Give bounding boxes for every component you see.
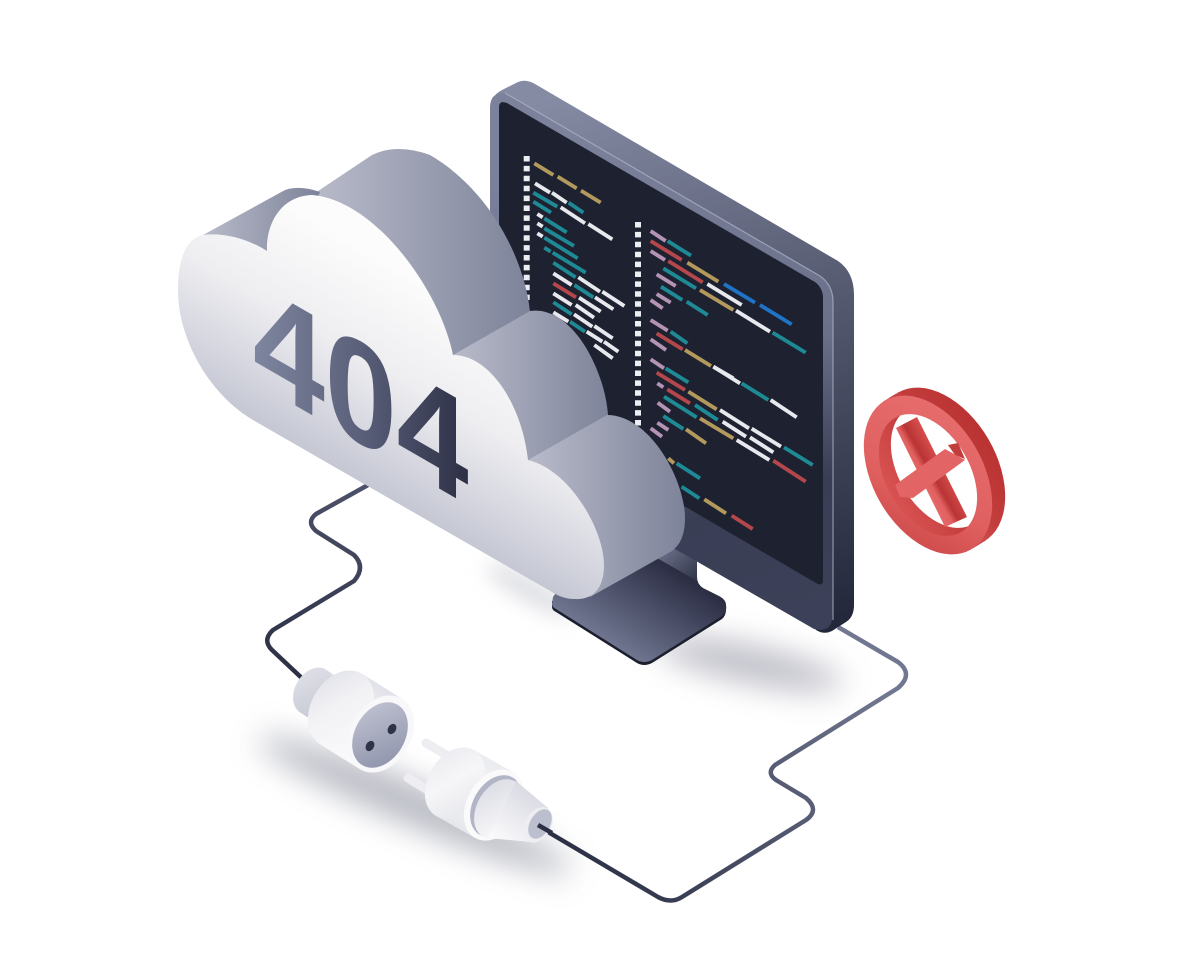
sign front ring: [837, 373, 1019, 577]
cable: monitor to plug: [538, 627, 906, 900]
plug cone: [488, 781, 548, 842]
cloud side: large lobe: [312, 149, 530, 380]
plug ring: [452, 759, 536, 851]
shadow: cloud: [481, 555, 579, 625]
monitor: [490, 81, 854, 665]
plug pins: [408, 743, 455, 795]
socket face: [335, 683, 427, 785]
cloud side: right lobe: [528, 415, 685, 597]
404 label: 404: [253, 249, 469, 537]
sign cross: [895, 417, 967, 527]
monitor back shell: [490, 81, 854, 633]
socket rear collar: [285, 660, 341, 722]
monitor screen: [499, 102, 823, 584]
cloud side: left lobe: [203, 188, 320, 255]
code listing: [527, 156, 813, 529]
cloud side: middle lobe: [453, 311, 610, 480]
illustration: isometric 404 cloud, monitor, sign and plug: [178, 80, 1006, 903]
socket connector: [285, 658, 427, 785]
code dashes: lower: [651, 333, 813, 529]
socket holes: [364, 722, 398, 753]
plug cable stub: [538, 825, 552, 833]
monitor front bezel: [490, 93, 833, 630]
plug body: [413, 737, 497, 829]
shadow: monitor: [654, 628, 846, 700]
shadow: plug: [251, 720, 579, 890]
plug tip: [517, 802, 559, 848]
cable: cloud to socket: [267, 485, 368, 682]
sign shell: [928, 467, 941, 475]
plug connector: [408, 737, 559, 851]
code dashes: upper: [533, 163, 806, 378]
cloud front face: [178, 195, 604, 599]
cloud with 404: [178, 149, 685, 599]
sign opening: [890, 414, 978, 528]
line-number gutters: [527, 156, 638, 430]
red prohibition sign: [864, 388, 1006, 554]
monitor stand: [552, 530, 726, 665]
sign inner wall: [859, 397, 997, 553]
socket body: [295, 658, 387, 760]
